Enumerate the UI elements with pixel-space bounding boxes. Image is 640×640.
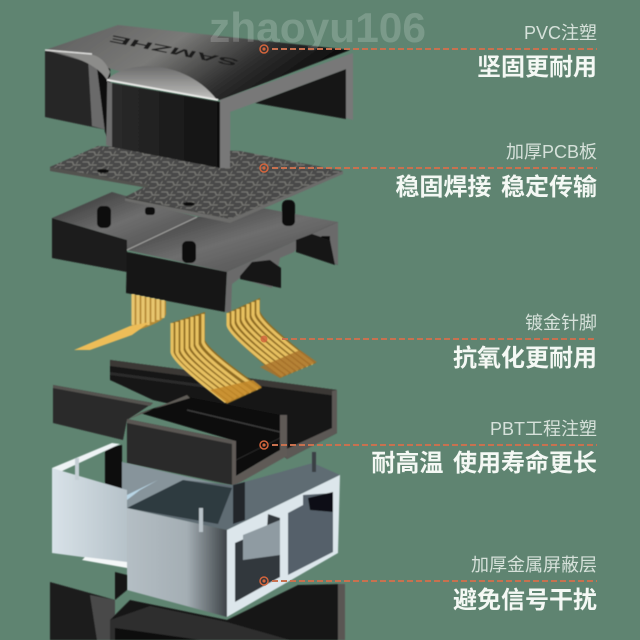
callout: gold pins: 抗氧化更耐用: [453, 345, 597, 372]
callout: PVC cover: [260, 23, 597, 81]
watermark: zhaoyu106: [209, 4, 426, 51]
callout: PCB board: 稳固焊接 稳定传输: [395, 174, 597, 201]
component: PBT tray: [53, 360, 337, 487]
component: metal shield: [52, 443, 340, 617]
callout: PVC cover: 坚固更耐用: [477, 54, 597, 81]
brand logo: SAMZHE: [106, 33, 242, 68]
pin group left: [74, 294, 166, 351]
component: PCB board: [50, 81, 343, 223]
callout: PCB board: [260, 142, 597, 201]
callout: metal shield: 避免信号干扰: [453, 587, 597, 614]
callout: metal shield: 加厚金属屏蔽层: [471, 555, 597, 575]
callout: PCB board: 加厚PCB板: [506, 142, 597, 162]
callout: gold pins: [260, 313, 597, 372]
callout: gold pins: 镀金针脚: [525, 313, 597, 333]
screw posts: [97, 200, 295, 263]
component: gold pins: [74, 294, 317, 404]
callout: metal shield: [260, 555, 597, 614]
callout: PVC cover: PVC注塑: [524, 23, 597, 43]
callout: PBT tray: [260, 419, 597, 477]
pin group right: [227, 298, 316, 378]
component: RJ45 plastic block: [52, 192, 338, 312]
callout: PBT tray: PBT工程注塑: [490, 419, 597, 439]
component: bottom housing: [50, 572, 345, 640]
component: PVC cover back: [45, 25, 353, 168]
callout: PBT tray: 耐高温 使用寿命更长: [371, 449, 597, 477]
pin group middle: [171, 312, 262, 404]
